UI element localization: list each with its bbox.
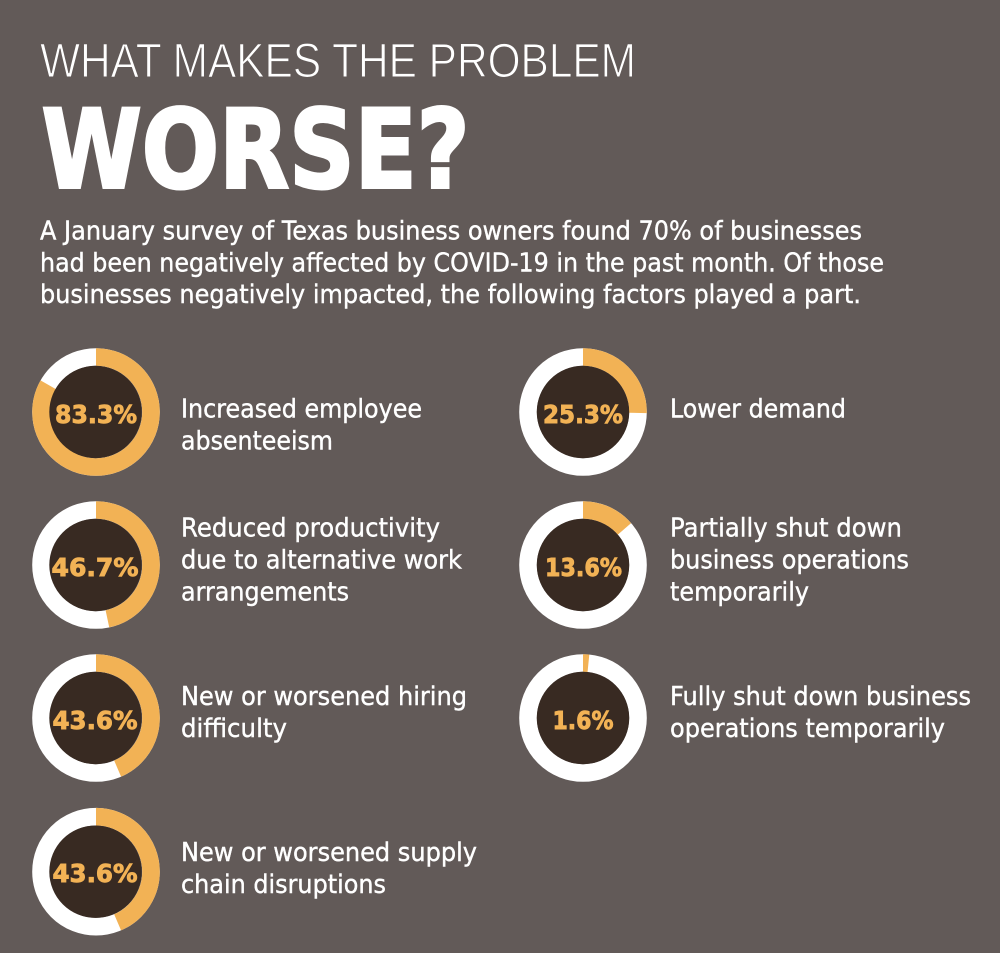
item: reduced productivity 46.7%: 46.7% bbox=[52, 553, 138, 582]
item: partially shut down 13.6%: Partially shut down bbox=[670, 514, 902, 544]
item: increased employee absenteeism 83.3%: 83.3% bbox=[55, 400, 137, 429]
item: hiring difficulty 43.6% bbox=[41, 663, 467, 773]
item: partially shut down 13.6%: temporarily bbox=[670, 578, 809, 608]
item: reduced productivity 46.7% bbox=[41, 510, 462, 620]
item: partially shut down 13.6%: business operations bbox=[670, 546, 909, 576]
item: hiring difficulty 43.6%: 43.6% bbox=[52, 706, 138, 735]
item: reduced productivity 46.7%: due to alternative work bbox=[181, 546, 462, 576]
title: what makes the problem: WHAT MAKES THE PROBLEM bbox=[40, 35, 636, 88]
item: reduced productivity 46.7%: arrangements bbox=[181, 578, 349, 608]
item: supply chain disruptions 43.6%: New or worsened supply bbox=[181, 838, 477, 868]
item: lower demand 25.3% bbox=[528, 357, 846, 467]
item: fully shut down 1.6%: Fully shut down business bbox=[670, 682, 971, 712]
item: fully shut down 1.6%: operations temporarily bbox=[670, 714, 945, 744]
item: supply chain disruptions 43.6%: 43.6% bbox=[52, 859, 138, 888]
title: worse?: WORSE? bbox=[42, 86, 470, 214]
item: increased employee absenteeism 83.3%: absenteeism bbox=[181, 426, 333, 456]
item: lower demand 25.3%: Lower demand bbox=[670, 394, 846, 424]
item: supply chain disruptions 43.6% bbox=[41, 817, 477, 927]
item: hiring difficulty 43.6%: difficulty bbox=[181, 714, 287, 744]
item: increased employee absenteeism 83.3%: Increased employee bbox=[181, 394, 422, 424]
item: lower demand 25.3%: 25.3% bbox=[543, 400, 623, 429]
intro text bbox=[40, 216, 884, 310]
intro text: A January survey of Texas business owners found 70% of businesses bbox=[40, 216, 862, 246]
intro text: businesses negatively impacted, the following factors played a part. bbox=[40, 280, 861, 310]
item: reduced productivity 46.7%: Reduced productivity bbox=[181, 514, 440, 544]
item: fully shut down 1.6%: 1.6% bbox=[552, 706, 614, 735]
intro text: had been negatively affected by COVID-19 in the past month. Of those bbox=[40, 248, 884, 278]
item: partially shut down 13.6% bbox=[528, 510, 909, 620]
item: partially shut down 13.6%: 13.6% bbox=[545, 553, 622, 582]
item: increased employee absenteeism 83.3% bbox=[41, 357, 422, 467]
item: supply chain disruptions 43.6%: chain disruptions bbox=[181, 870, 386, 900]
item: fully shut down 1.6% bbox=[528, 663, 971, 773]
item: hiring difficulty 43.6%: New or worsened hiring bbox=[181, 682, 467, 712]
